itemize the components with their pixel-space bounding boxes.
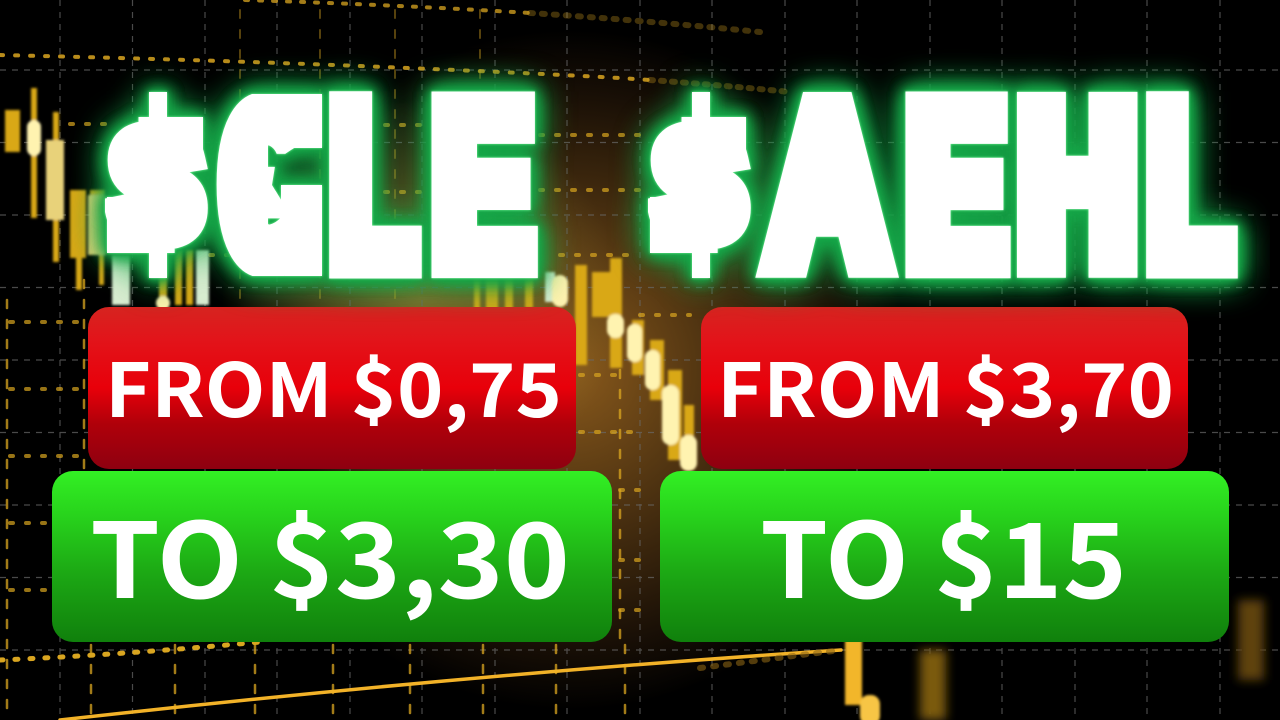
panel: $AEHL to price [660,471,1229,642]
title: $GLE ticker: E [434,55,531,315]
text: to 15: TO $15 [760,477,1127,628]
panel: $AEHL from price [701,307,1188,469]
text: from 0,75: FROM $0,75 [105,332,562,439]
title: $GLE ticker: $ [117,96,195,274]
yellow dotted price lines [0,0,841,720]
title: $GLE ticker: L [332,56,414,315]
title: $AEHL ticker: $ [660,96,738,274]
title: $AEHL ticker: H [1019,56,1135,315]
text: from 3,70: FROM $3,70 [717,332,1174,439]
title: $GLE ticker [111,55,531,315]
title: $AEHL ticker: E [908,56,1004,316]
title: $AEHL ticker [654,55,1230,316]
text: to 3,30: TO $3,30 [90,477,570,628]
title: $AEHL ticker: L [1149,55,1230,315]
title: $GLE ticker: G [223,59,314,310]
title: $AEHL ticker: A [768,55,887,315]
panel: $GLE from price [88,307,576,469]
candlesticks [5,88,880,720]
panel: $GLE to price [52,471,612,642]
